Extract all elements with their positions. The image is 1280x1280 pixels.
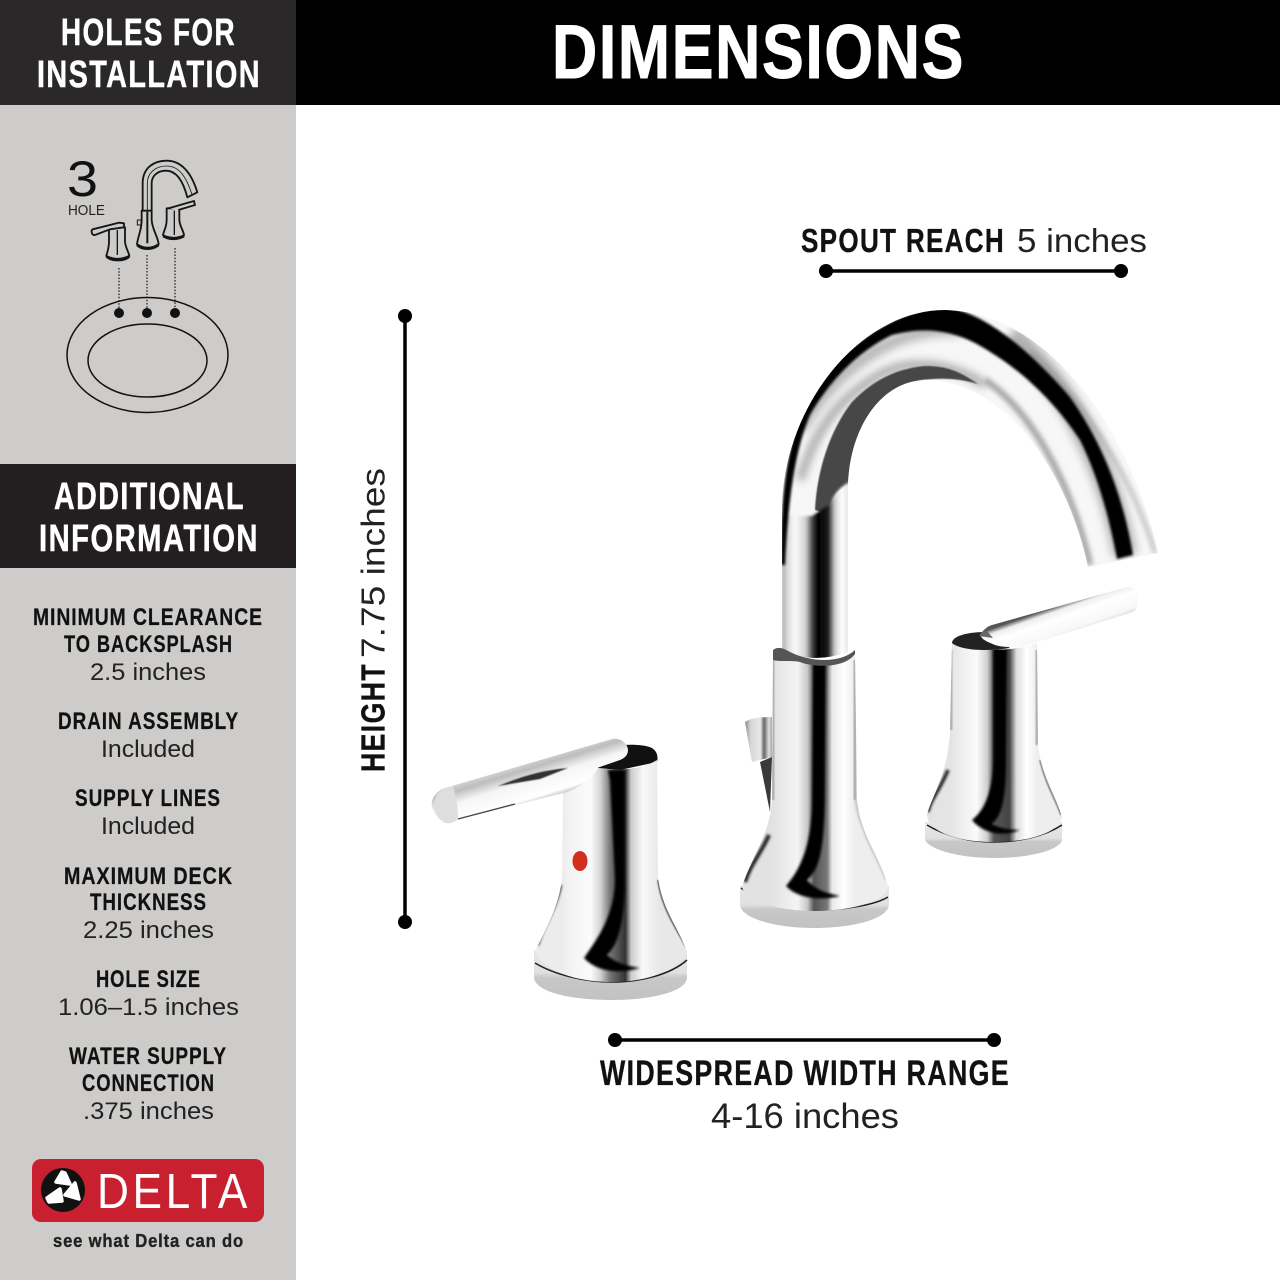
dimension: widespread width range: WIDESPREAD WIDTH RANGE [600, 1054, 1010, 1093]
logo: Delta: DELTA [97, 1165, 251, 1219]
logo: Delta [32, 1159, 264, 1251]
faucet: pop-up rod [745, 717, 772, 812]
dimension: spout reach: SPOUT REACH [801, 222, 1005, 259]
icon: 3 hole sink diagram: HOLE [68, 203, 105, 219]
spec: hole size: HOLE SIZE [96, 966, 201, 993]
logo: Delta: see what Delta can do [53, 1231, 244, 1251]
spec: minimum clearance: TO BACKSPLASH [64, 631, 233, 658]
faucet: right handle [925, 587, 1138, 858]
heading: holes for installation: INSTALLATION [37, 54, 261, 96]
dimension: widespread width range: 4-16 inches [711, 1097, 899, 1136]
spec: maximum deck thickness: MAXIMUM DECK [64, 863, 233, 890]
heading: holes for installation [0, 0, 296, 105]
faucet photo illustration [432, 308, 1158, 1000]
dimension: spout reach: 5 inches [1017, 222, 1147, 259]
spec: water supply connection: WATER SUPPLY [69, 1043, 227, 1070]
spec: hole size: 1.06–1.5 inches [58, 994, 239, 1021]
spec: maximum deck thickness: THICKNESS [90, 889, 207, 916]
spec: supply lines: Included [101, 813, 195, 840]
dimension: widespread width range [600, 1033, 1010, 1136]
faucet: spout [781, 308, 1158, 660]
heading: holes for installation: HOLES FOR [61, 12, 236, 54]
spec: supply lines: SUPPLY LINES [75, 785, 221, 812]
icon: 3 hole sink diagram [67, 151, 228, 412]
spec: water supply connection: .375 inches [83, 1098, 214, 1125]
spec: drain assembly [58, 708, 239, 763]
dimension: height: HEIGHT [354, 663, 392, 772]
heading: additional information: ADDITIONAL [54, 476, 245, 518]
faucet: left handle [432, 739, 687, 1000]
spec: drain assembly: DRAIN ASSEMBLY [58, 708, 239, 735]
spec: supply lines [75, 785, 221, 840]
spec: maximum deck thickness: 2.25 inches [83, 917, 214, 944]
title banner [296, 0, 1280, 105]
dimension: height [354, 309, 412, 929]
faucet: red hot indicator [572, 851, 588, 871]
spec: minimum clearance: MINIMUM CLEARANCE [33, 604, 263, 631]
heading: additional information: INFORMATION [39, 518, 259, 560]
spec: hole size [58, 966, 239, 1021]
dimension: height: 7.75 inches [354, 468, 392, 658]
title banner: DIMENSIONS [552, 10, 965, 95]
spec: minimum clearance [33, 604, 263, 686]
dimension: spout reach [801, 222, 1147, 278]
spec: maximum deck thickness [64, 863, 233, 944]
sidebar panel [0, 0, 296, 1280]
icon: 3 hole sink diagram: 3 [67, 151, 98, 207]
faucet: spout collar [773, 648, 855, 666]
faucet: center body [740, 655, 889, 928]
spec: minimum clearance: 2.5 inches [90, 659, 206, 686]
spec: water supply connection: CONNECTION [82, 1070, 215, 1097]
spec: drain assembly: Included [101, 736, 195, 763]
spec: water supply connection [69, 1043, 227, 1125]
heading: additional information [0, 464, 296, 568]
